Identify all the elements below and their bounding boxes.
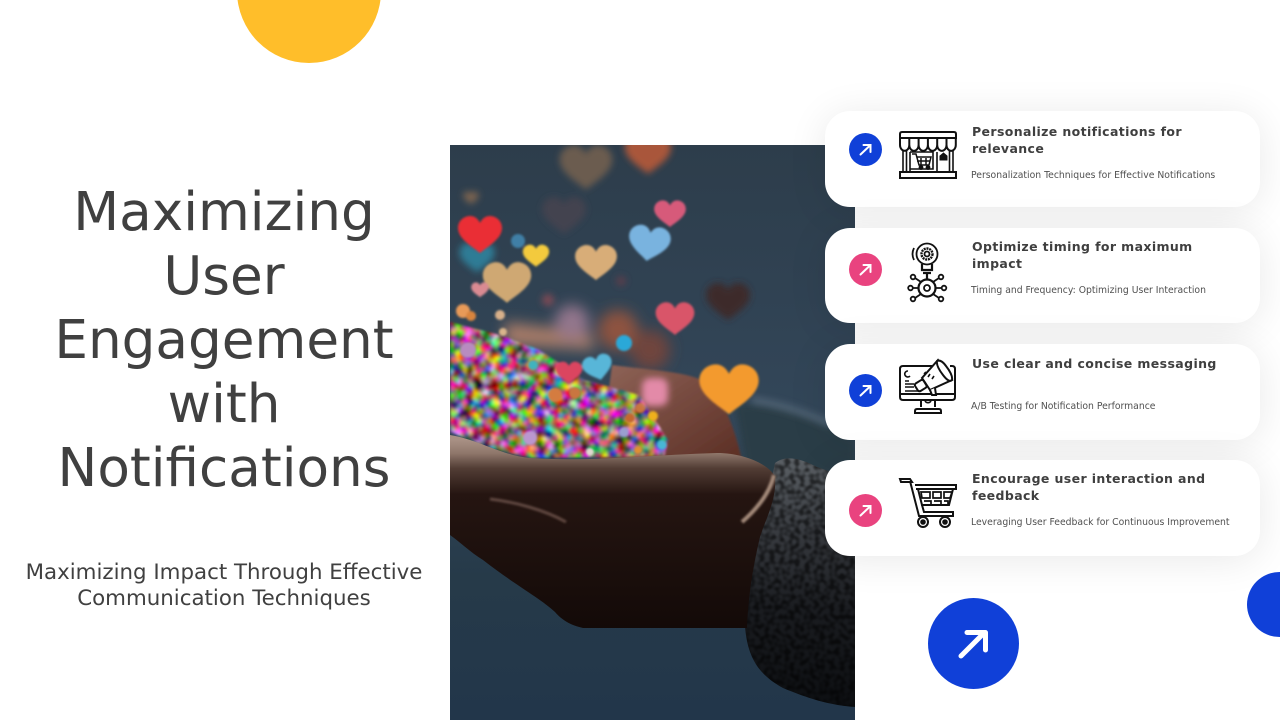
card description: Leveraging User Feedback for Continuous Improvement (971, 517, 1230, 528)
card description: A/B Testing for Notification Performance (971, 401, 1155, 412)
title: with (168, 373, 280, 435)
card description: Personalization Techniques for Effective Notifications (971, 170, 1215, 181)
subtitle (26, 560, 422, 611)
arrow badge: blue (849, 133, 882, 166)
sleeve (745, 458, 855, 707)
arrow badge: pink (849, 494, 882, 527)
card heading: Use clear and concise messaging (972, 356, 1217, 371)
title: Engagement (54, 309, 394, 371)
palm (600, 365, 742, 460)
title: Notifications (58, 437, 390, 499)
sleeve back (735, 404, 855, 490)
icon: light bulb with gear and network (907, 242, 948, 302)
subtitle: Maximizing Impact Through Effective (26, 560, 422, 585)
title: User (163, 245, 285, 307)
card heading: Optimize timing for maximum impact (972, 239, 1193, 271)
large blue arrow button (928, 598, 1019, 689)
sleeve knit texture (745, 455, 855, 710)
card description: Timing and Frequency: Optimizing User Interaction (971, 285, 1206, 296)
sharp hearts (458, 200, 759, 414)
confetti texture (450, 315, 675, 460)
photo: hand releasing hearts and confetti (450, 145, 855, 720)
panel: card 4 (825, 460, 1260, 556)
arrow badge: blue (849, 374, 882, 407)
subtitle: Communication Techniques (77, 586, 371, 611)
confetti highlights (456, 304, 667, 456)
panel: card 3 (825, 344, 1260, 440)
title (54, 181, 394, 499)
panel: card 1 (825, 111, 1260, 207)
icon: storefront with cart (899, 131, 957, 179)
blurred hearts (459, 135, 750, 320)
card heading: Encourage user interaction and feedback (972, 471, 1205, 503)
title: Maximizing (73, 181, 375, 243)
arrow badge: pink (849, 253, 882, 286)
blurred pink heart (642, 378, 668, 406)
panel: card 2 (825, 228, 1260, 323)
decorative blue circle at right edge (1247, 572, 1280, 637)
icon: monitor with megaphone (899, 358, 956, 414)
card heading: Personalize notifications for relevance (972, 124, 1182, 156)
icon: shopping cart (898, 478, 957, 528)
hand (450, 435, 775, 628)
decorative yellow circle (237, 0, 381, 63)
blurred fingers and glow (505, 305, 670, 370)
